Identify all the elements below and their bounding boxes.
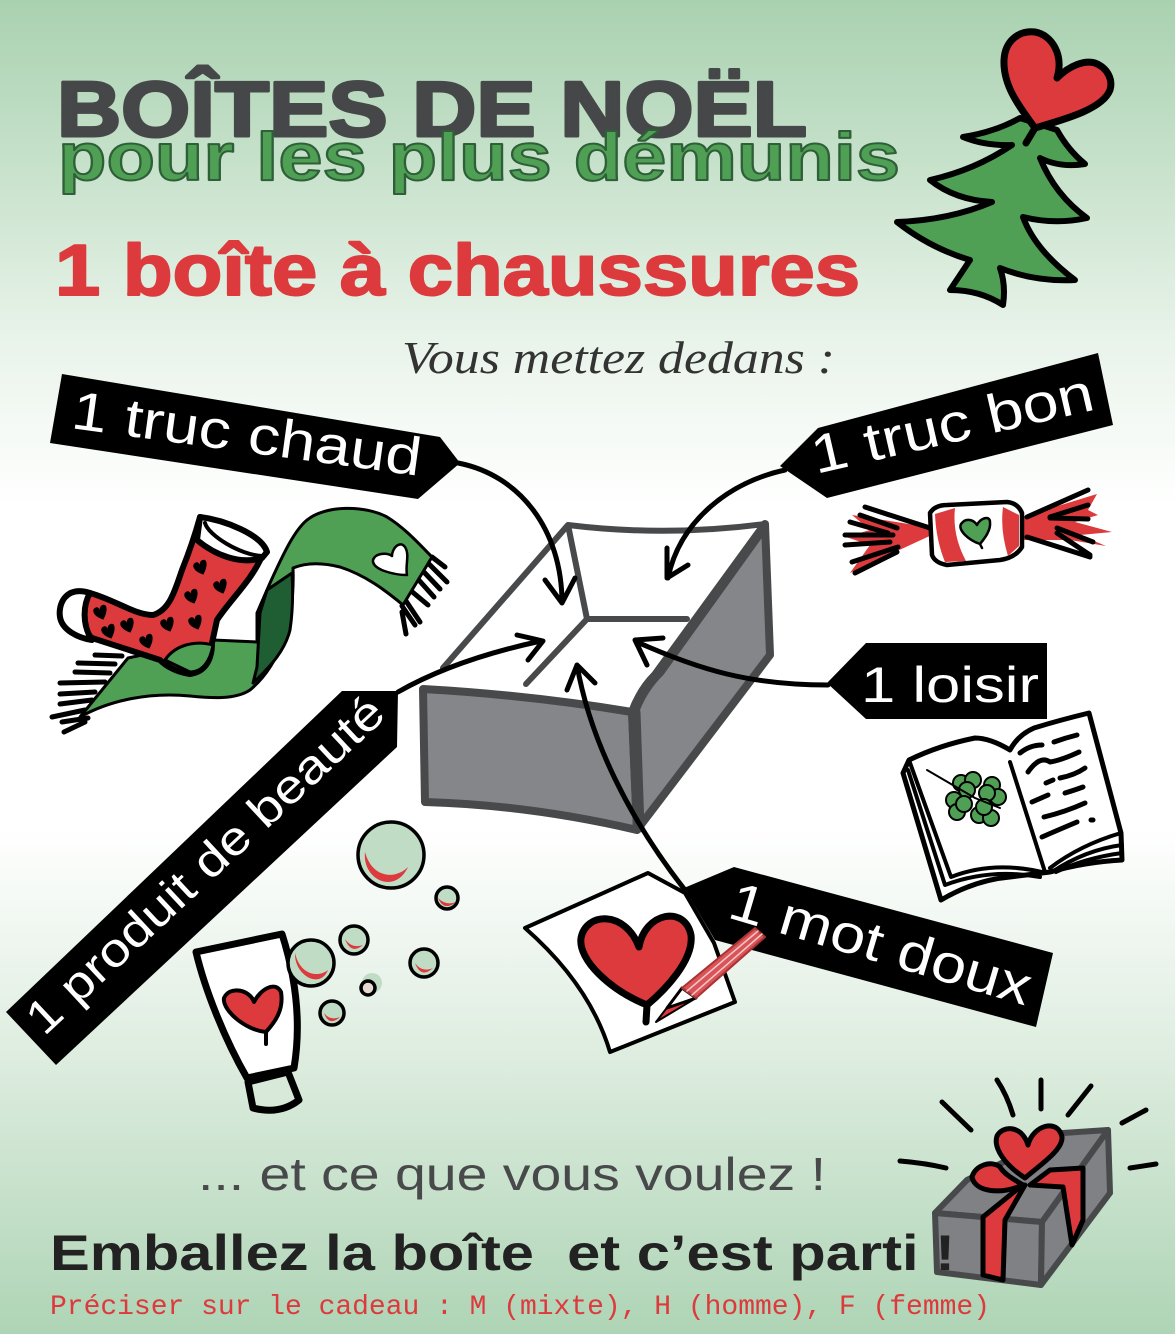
rays	[900, 1080, 1156, 1168]
title line 2: pour les plus démunis	[58, 119, 900, 195]
front wall	[423, 689, 637, 830]
right wall	[632, 524, 770, 830]
page lines	[908, 760, 1122, 885]
icon: candy	[845, 490, 1112, 573]
box edges inside	[443, 524, 765, 684]
wrapper right fringe	[1027, 490, 1093, 557]
gift front	[935, 1213, 1042, 1285]
ribbons	[983, 1168, 1083, 1280]
bubble small	[436, 887, 458, 909]
title	[57, 65, 900, 195]
bubble tiny	[361, 973, 382, 995]
book pages stack	[903, 713, 1122, 900]
arrow: truc bon	[667, 470, 785, 578]
tag text: 1 mot doux	[723, 871, 1039, 1017]
tag shape	[6, 691, 398, 1065]
scarf heart	[373, 544, 407, 575]
icon: christmas tree with heart	[897, 32, 1111, 305]
tree	[897, 118, 1087, 305]
handwritten intro: Vous mettez dedans :	[402, 332, 835, 383]
sock cuff	[197, 517, 267, 560]
bubble near tube	[288, 940, 334, 986]
arrows into box	[398, 463, 828, 890]
scarf fringe left	[52, 655, 122, 732]
bow small heart	[972, 1164, 1023, 1191]
bow large heart	[996, 1126, 1062, 1178]
book text lines	[1020, 735, 1093, 837]
tag text: 1 truc chaud	[68, 380, 425, 488]
scarf fold	[253, 573, 293, 683]
candy heart	[960, 518, 990, 548]
tag text: 1 truc bon	[805, 362, 1099, 486]
arrow: produit de beauté	[398, 635, 543, 692]
tube body	[196, 934, 297, 1078]
tag: 1 produit de beauté	[6, 685, 398, 1065]
subtitle: 1 boîte à chaussures	[55, 231, 860, 311]
scarf fringe right	[402, 557, 447, 634]
bubble medium	[340, 926, 368, 954]
tag shape	[684, 867, 1053, 1027]
tube heart	[224, 987, 282, 1044]
tag: 1 truc chaud	[50, 374, 460, 499]
sock toe	[60, 591, 92, 640]
bubbles	[288, 822, 458, 1025]
wrapper left red	[846, 515, 934, 573]
pencil	[656, 988, 696, 1022]
bubble large	[358, 822, 424, 888]
tube cap	[248, 1072, 299, 1110]
sock heel gap	[165, 643, 213, 672]
gift top	[935, 1130, 1108, 1222]
paper	[525, 873, 735, 1052]
tag shape	[827, 643, 1047, 719]
note: Préciser sur le cadeau : M (mixte), H (homme), F (femme)	[50, 1292, 990, 1323]
arrow: truc chaud	[458, 463, 575, 603]
icon: gift	[900, 1080, 1156, 1285]
icon: note with heart and pencil	[525, 873, 765, 1052]
bubble lower	[320, 1001, 344, 1025]
heart	[1004, 32, 1111, 143]
tag: 1 loisir	[827, 643, 1047, 719]
icon: open box	[423, 524, 770, 830]
heart	[581, 916, 691, 1022]
wrapper right red	[1022, 494, 1112, 546]
sock hearts	[92, 559, 230, 651]
tag text: 1 loisir	[861, 657, 1039, 713]
arrow: mot doux	[567, 665, 685, 890]
arrow: loisir	[635, 638, 828, 685]
gift side	[1041, 1130, 1110, 1285]
icon: scarf and sock	[52, 508, 447, 732]
closing line: ... et ce que vous voulez !	[198, 1148, 826, 1200]
candy stripes	[935, 507, 1019, 562]
icon: book	[903, 713, 1122, 900]
wrapper left fringe	[845, 507, 930, 573]
tag shape	[780, 353, 1113, 498]
icon: tube of cream	[196, 934, 299, 1110]
tag: 1 mot doux	[684, 867, 1053, 1027]
clover	[927, 770, 1006, 826]
title line 1: BOÎTES DE NOËL	[57, 65, 807, 153]
box interior	[424, 524, 765, 712]
scarf	[80, 508, 432, 717]
tag: 1 truc bon	[780, 353, 1113, 498]
call to action: Emballez la boîte et c’est parti !	[50, 1225, 955, 1281]
sock body	[84, 517, 262, 674]
box rim	[636, 530, 762, 828]
tag text: 1 produit de beauté	[15, 685, 395, 1044]
tag shape	[50, 374, 460, 499]
candy body	[930, 502, 1022, 565]
bubble right	[410, 949, 438, 977]
